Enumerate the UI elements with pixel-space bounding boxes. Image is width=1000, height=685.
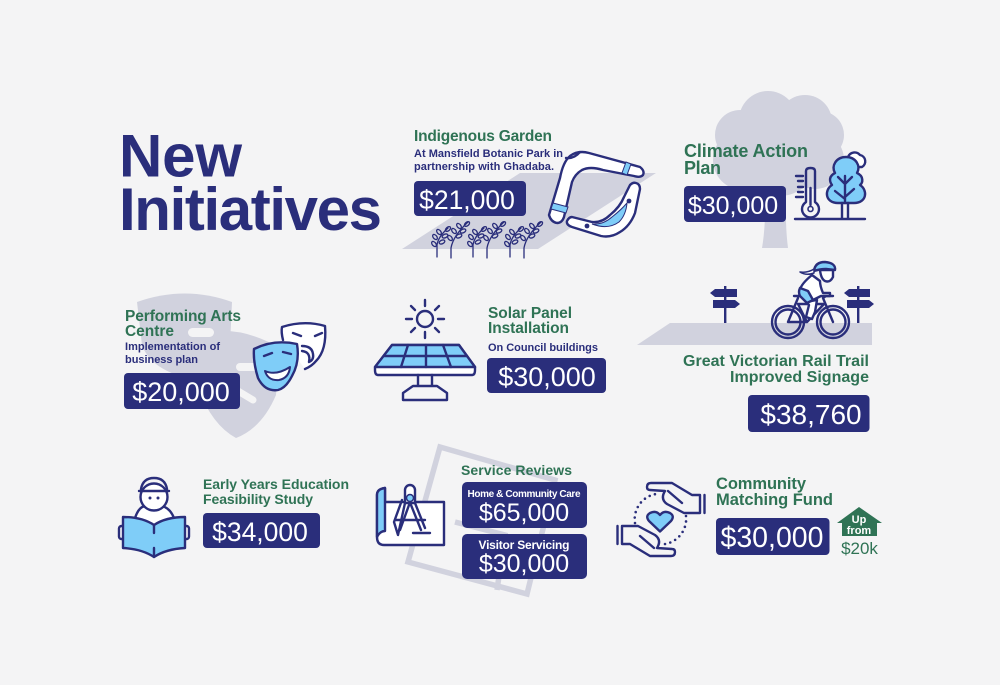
background parallelogram [402,173,656,249]
heading: Community Matching Fund: Matching Fund [716,491,833,509]
panel: Early Years Education [119,476,349,557]
heading: Solar Panel Installation: Solar Panel [488,305,572,322]
title [119,122,382,243]
amount: Home &amp; Community Care: $65,000 [479,499,569,527]
heading: Solar Panel Installation [488,305,572,337]
heading: Climate Action Plan [684,141,808,178]
amount: $34,000: $34,000 [212,517,308,547]
badge: up from $20k [837,507,882,558]
icon: solar panel [375,300,475,400]
amount: Home &amp; Community Care [462,482,587,528]
panel: Indigenous Garden [402,128,656,258]
icon: right signpost [844,286,874,323]
amount: Visitor Servicing: $30,000 [479,550,569,578]
background plans [408,447,555,594]
amount: $21,000: $21,000 [419,185,515,215]
amount: $30,000: $30,000 [498,362,596,392]
badge: up from $20k: from [847,525,871,537]
panel: Climate Action Plan [684,91,865,248]
description: Performing Arts Centre: business plan [125,354,198,366]
amount: Visitor Servicing: Visitor Servicing [478,538,570,552]
panel: Great Victorian Rail Trail [637,262,874,432]
heading: Service Reviews: Service Reviews [461,462,572,478]
heading: Indigenous Garden: Indigenous Garden [414,128,552,145]
panel: Performing Arts Centre [124,294,325,438]
icon: thermometer and tree [795,152,865,219]
icon: plants [431,221,543,258]
heading: Early Years Education [203,476,349,507]
description: Solar Panel Installation: On Council buildings [488,342,598,354]
heading: Community Matching Fund: Community [716,475,807,493]
heading: Early Years Education: Feasibility Study [203,491,313,507]
amount: $30,000: $30,000 [688,192,778,220]
description: Indigenous Garden: At Mansfield Botanic Park in [414,148,563,160]
icon: left signpost [710,286,740,323]
icon: theatre masks [254,323,325,390]
panel: Solar Panel Installation [375,300,606,400]
description: Indigenous Garden [414,148,563,173]
title: New [119,122,242,190]
heading: Performing Arts Centre [125,308,241,340]
background tree silhouette [713,91,844,248]
icon: reading child [119,478,189,557]
icon: boomerangs [549,152,644,236]
icon: cyclist [772,262,849,338]
heading: Climate Action Plan: Plan [684,158,721,178]
badge: up from $20k: $20k [841,539,878,558]
amount: $20,000: $20,000 [132,377,230,407]
background masks [137,294,280,438]
heading: Solar Panel Installation: Installation [488,320,569,337]
heading: Performing Arts Centre: Centre [125,323,174,340]
amount: Visitor Servicing [462,534,587,579]
panel: Community Matching Fund [618,475,882,558]
amount: $30,000: $30,000 [720,522,824,554]
heading: Great Victorian Rail Trail: Great Victorian Rail Trail [683,353,869,370]
icon: blueprint and compass [377,485,444,545]
badge: up from $20k: Up [852,514,867,526]
heading: Climate Action Plan: Climate Action [684,141,808,161]
icon: hands and heart [618,483,704,556]
title: Initiatives [119,176,382,243]
heading: Great Victorian Rail Trail: Improved Signage [730,369,869,386]
heading: Performing Arts Centre: Performing Arts [125,308,241,325]
description: Performing Arts Centre [125,341,220,366]
road shape [637,323,872,345]
amount: $38,760 [748,395,870,432]
description: Performing Arts Centre: Implementation of [125,341,220,353]
description: Indigenous Garden: partnership with Ghadaba. [414,161,554,173]
heading: Early Years Education: Early Years Education [203,476,349,492]
heading: Community Matching Fund [716,475,833,509]
amount: $38,760: $38,760 [760,399,862,430]
heading: Great Victorian Rail Trail [683,353,869,386]
amount: $30,000 [684,186,786,222]
panel: Service Reviews [377,447,587,594]
amount: Home &amp; Community Care: Home & Community Care [468,489,581,500]
